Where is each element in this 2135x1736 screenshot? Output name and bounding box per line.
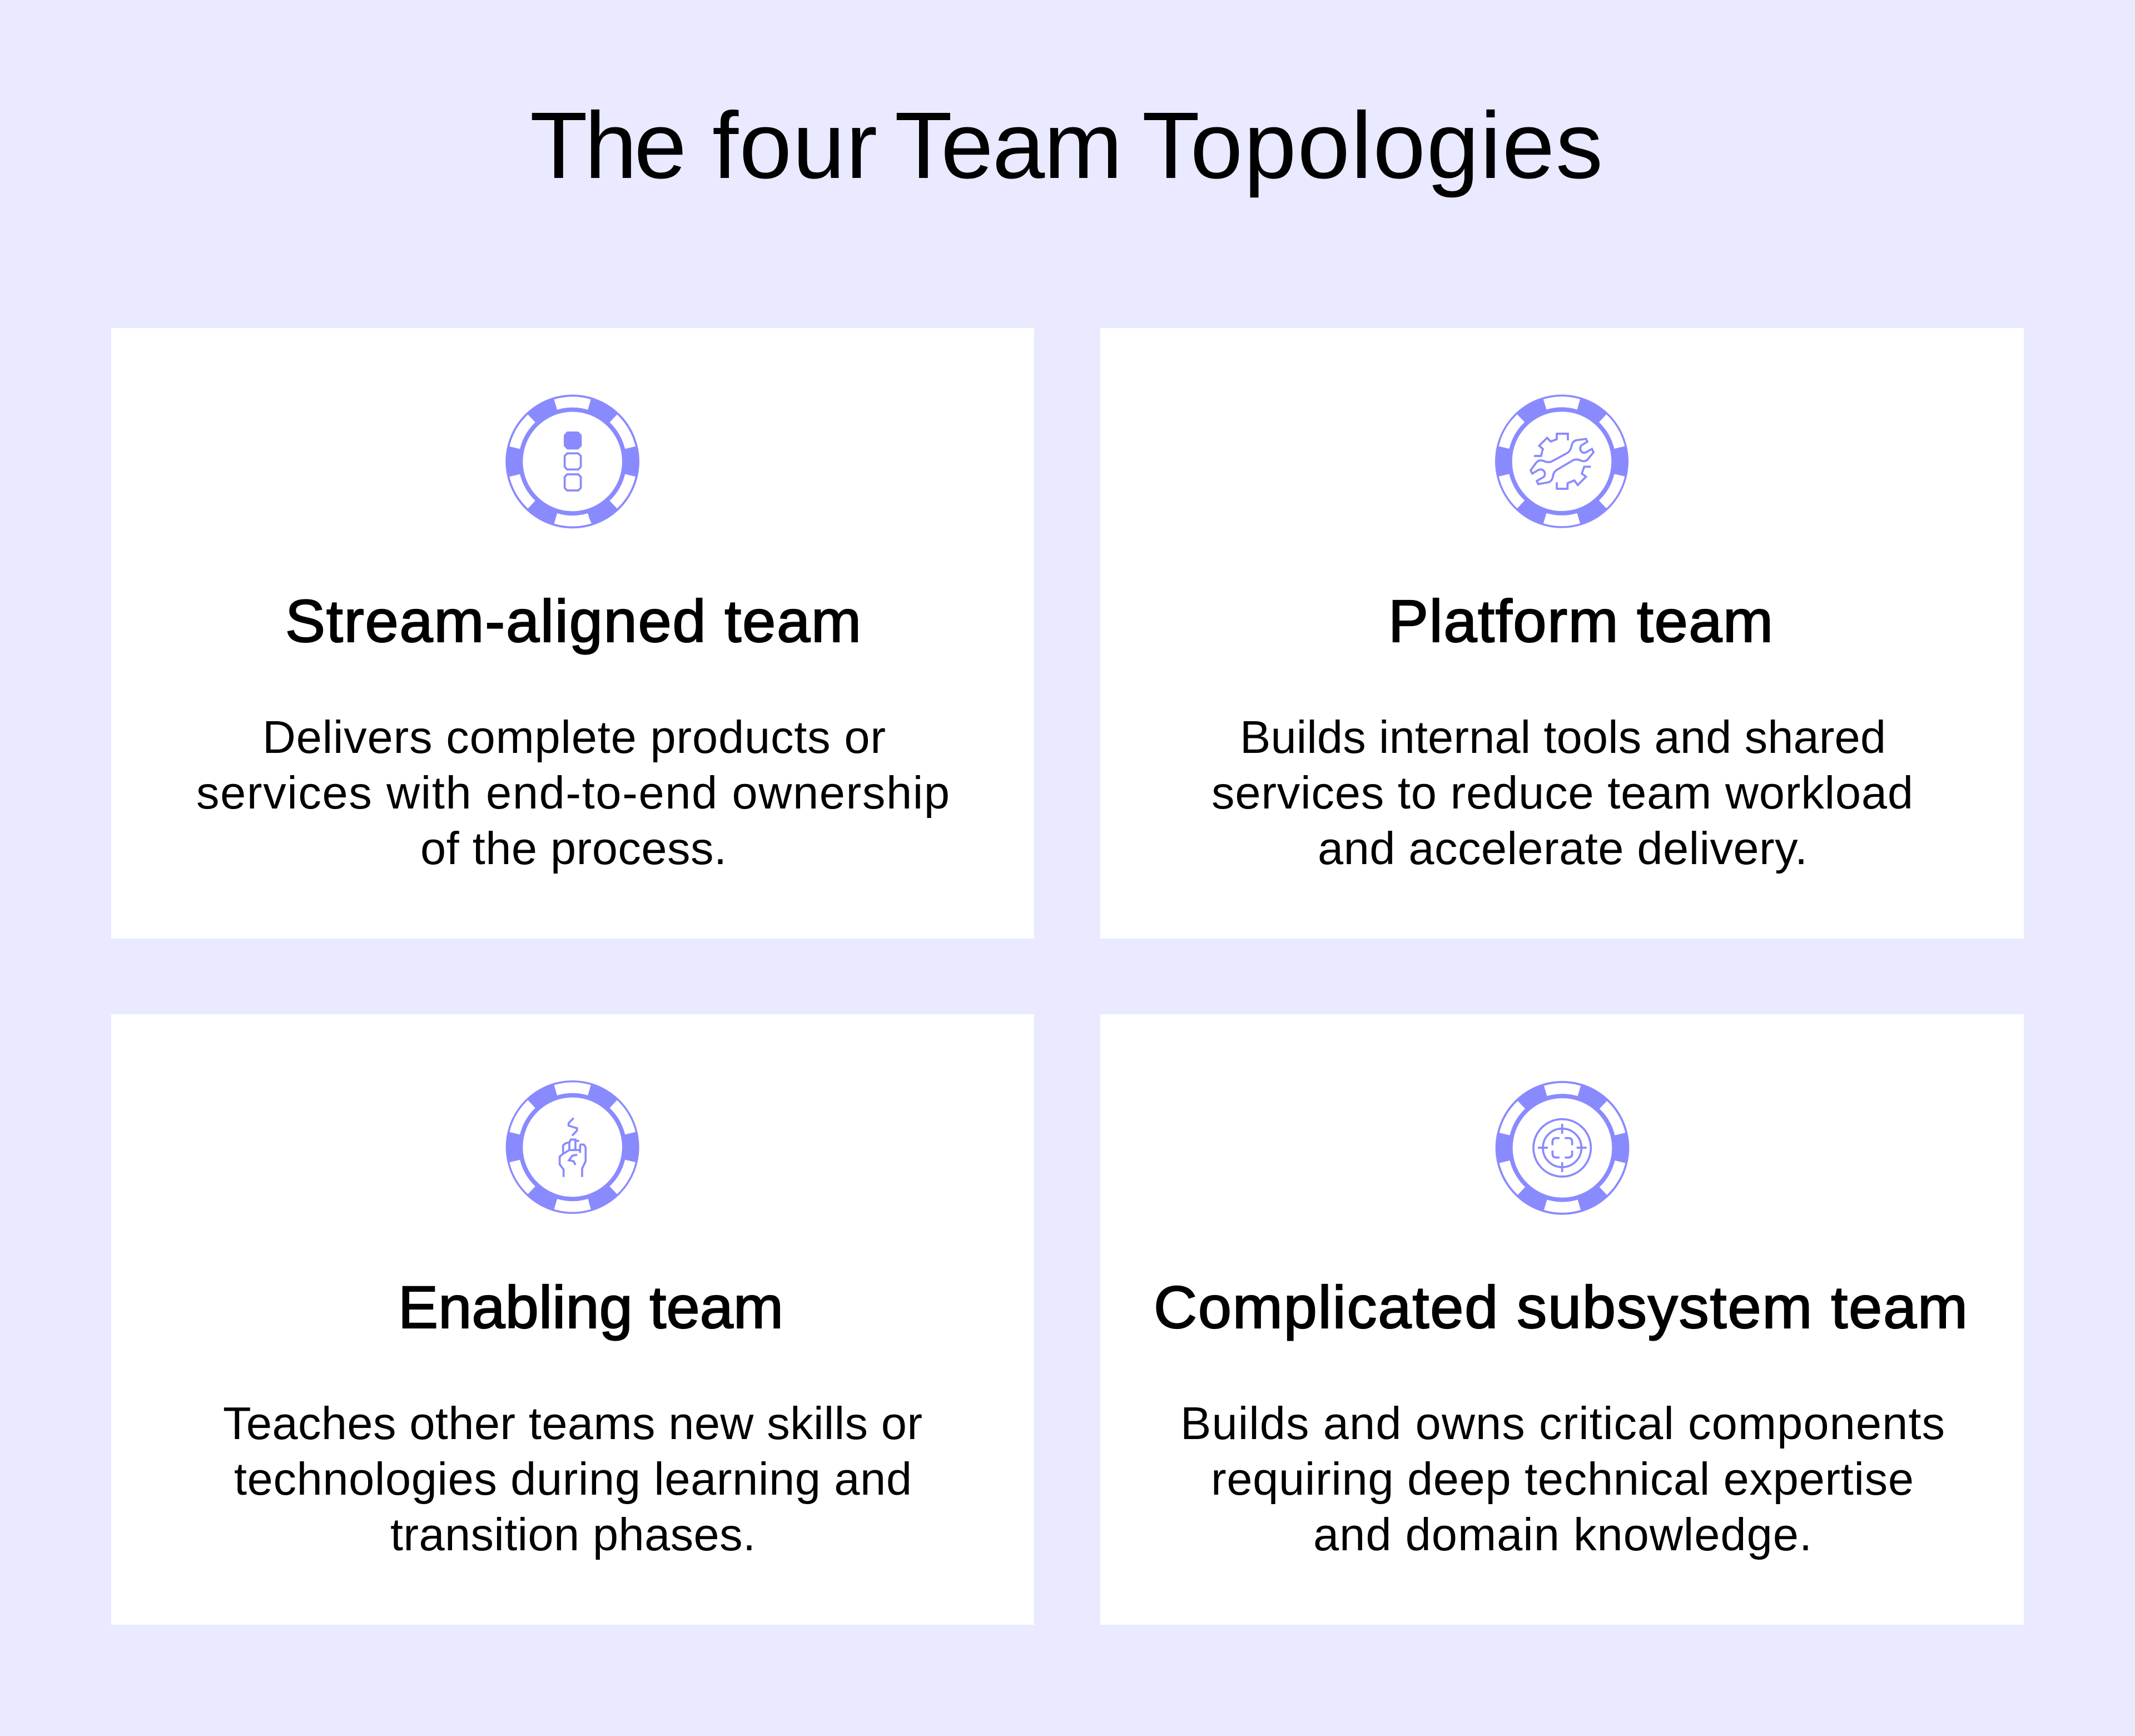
heading: Complicated subsystem team [1154,1273,1968,1341]
heading: Enabling team [398,1273,783,1341]
card background [1100,1014,2024,1625]
title: The [530,93,687,199]
description: Builds and owns critical components [1180,1397,1945,1449]
description: technologies during learning and [234,1453,912,1505]
title [530,93,1603,199]
icon: stacked squares [505,395,639,528]
panel: stream-aligned team [111,328,1034,939]
heading: Stream-aligned team [285,587,861,654]
card background [111,328,1034,939]
description: requiring deep technical expertise [1211,1453,1914,1505]
icon: gear and wrench [1495,395,1628,528]
description: Teaches other teams new skills or [223,1397,922,1449]
description: and domain knowledge. [1313,1509,1812,1560]
description: Delivers complete products or [262,711,886,763]
title: Team [895,93,1123,199]
description [196,711,950,874]
description [1212,711,1913,874]
description: Builds internal tools and shared [1240,711,1886,763]
panel: enabling team [111,1014,1034,1625]
heading: Platform team [1388,587,1773,654]
icon: raised fist with spark [506,1080,639,1214]
title: Topologies [1142,93,1603,199]
card background [1100,328,2024,939]
description: transition phases. [390,1509,756,1560]
description: and accelerate delivery. [1318,822,1808,874]
panel: platform team [1100,328,2024,939]
card background [111,1014,1034,1625]
panel: complicated subsystem team [1100,1014,2024,1625]
description: services with end-to-end ownership [196,767,950,819]
description: services to reduce team workload [1212,767,1913,819]
icon: target crosshair [1496,1081,1629,1215]
description [223,1397,922,1560]
description: of the process. [420,822,727,874]
description [1180,1397,1945,1560]
title: four [712,93,877,199]
